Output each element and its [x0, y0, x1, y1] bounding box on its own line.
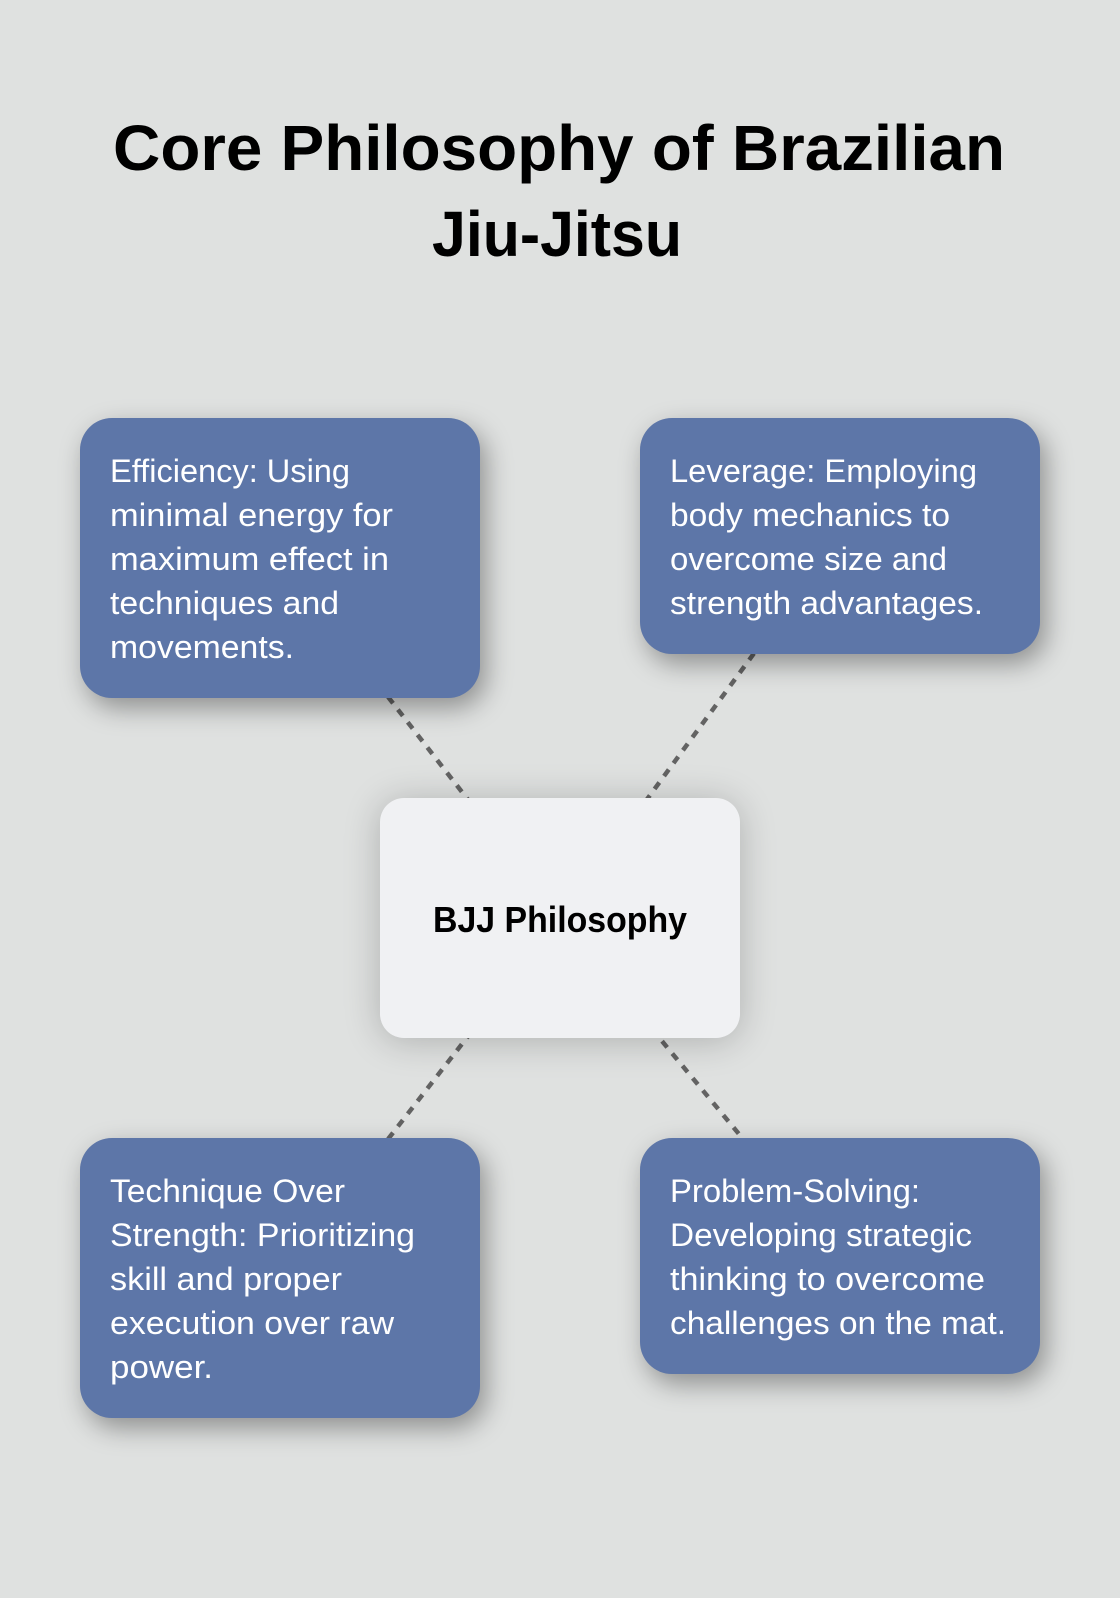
panel: technique over strength: Technique Over [110, 1173, 345, 1209]
panel: problem-solving [640, 1138, 1040, 1374]
panel: technique over strength [80, 1138, 480, 1418]
panel: leverage: Leverage: Employing [670, 453, 977, 489]
title: Jiu-Jitsu [432, 198, 682, 270]
panel: efficiency: maximum effect in [110, 541, 389, 577]
panel: problem-solving: Developing strategic [670, 1217, 972, 1253]
panel: problem-solving: thinking to overcome [670, 1261, 985, 1297]
panel: technique over strength: execution over raw [110, 1305, 395, 1341]
panel: efficiency: techniques and [110, 585, 339, 621]
panel: leverage: strength advantages. [670, 585, 983, 621]
panel: center node: BJJ Philosophy [433, 899, 687, 940]
title [113, 112, 1005, 270]
panel: technique over strength: power. [110, 1349, 213, 1385]
panel: efficiency: Efficiency: Using [110, 453, 350, 489]
panel: problem-solving: challenges on the mat. [670, 1305, 1006, 1341]
panel: efficiency [80, 418, 480, 698]
panel: problem-solving: Problem-Solving: [670, 1173, 920, 1209]
panel: leverage: overcome size and [670, 541, 947, 577]
panel: center node [380, 798, 740, 1038]
panel: leverage [640, 418, 1040, 654]
panel: technique over strength: skill and proper [110, 1261, 342, 1297]
panel: leverage: body mechanics to [670, 497, 950, 533]
panel: technique over strength: Strength: Prioritizing [110, 1217, 415, 1253]
title: Core Philosophy of Brazilian [113, 112, 1005, 184]
panel: efficiency: minimal energy for [110, 497, 393, 533]
panel: efficiency: movements. [110, 629, 294, 665]
